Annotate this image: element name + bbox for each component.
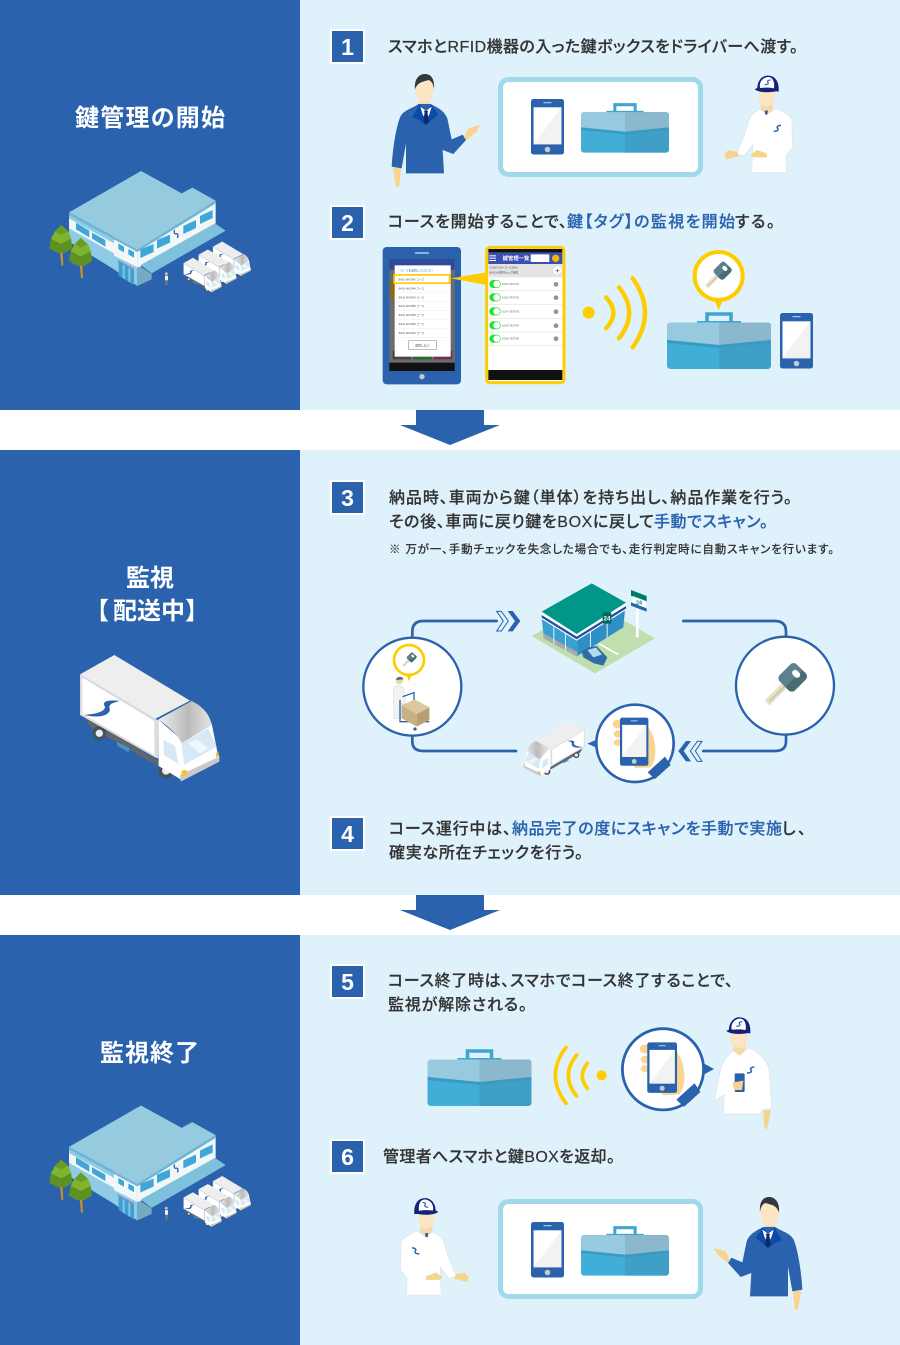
arrow down 2 — [400, 895, 500, 930]
step 1 text: スマホとRFID機器の入った鍵ボックスをドライバーへ渡す。 — [388, 38, 798, 56]
panel: end of monitoring — [0, 935, 900, 1345]
small truck — [524, 721, 585, 776]
circle: key — [736, 637, 834, 735]
step 5 text: コース終了時は、スマホでコース終了することで、 — [388, 972, 733, 990]
heading: start: 鍵管理の開始 — [75, 105, 225, 132]
step 5 badge — [331, 965, 364, 998]
circle: driver with cart — [363, 638, 461, 736]
tablet with course dialog: BA01 MK0359 コース — [399, 322, 424, 326]
driver with phone — [714, 1017, 772, 1131]
step 4 text: 納品完了の度にスキャンを手動で実施 — [512, 820, 782, 838]
step 5 text — [388, 972, 733, 1014]
step 4 badge: 4 — [341, 821, 354, 847]
step 3 text: 納品時、車両から鍵（単体）を持ち出し、納品作業を行う。 — [389, 489, 792, 507]
tablet with course dialog: コースを選択してください — [400, 267, 433, 272]
illustration: delivery truck — [80, 655, 219, 782]
frame: phone and key box — [500, 80, 700, 174]
yellow app screen: 2/1/08 テストコース(MH) — [489, 265, 518, 269]
tablet with course dialog: 選択しない — [415, 343, 430, 348]
step 2 text: コースを開始することで、 — [388, 213, 567, 231]
tablet with course dialog — [383, 247, 461, 384]
chevrons right — [497, 611, 520, 631]
arrow down 1 — [400, 410, 500, 445]
illustration: warehouse — [49, 1105, 251, 1227]
tablet with course dialog: BA01 MK0355 コース — [399, 304, 424, 308]
tablet with course dialog: BA01 MK0343 コース — [399, 278, 424, 282]
step 1 badge — [331, 30, 364, 63]
step 4 badge — [331, 817, 364, 850]
convenience store: 24 — [636, 600, 642, 606]
yellow app screen: + — [555, 266, 559, 275]
yellow app screen: 16:52 TEST02 — [502, 295, 520, 299]
yellow app screen: 16:54 TEST03 — [502, 309, 520, 313]
wireless signal — [583, 278, 645, 347]
panel: monitoring during delivery — [0, 450, 900, 895]
step 6 text: 管理者へスマホと鍵BOXを返却。 — [383, 1148, 615, 1166]
convenience store: 24 — [604, 617, 611, 623]
smartphone — [780, 313, 813, 368]
heading: monitoring — [85, 565, 209, 625]
tablet with course dialog: BA01 MK0344 コース — [399, 286, 424, 290]
key box — [428, 1051, 532, 1106]
bubble tail — [703, 1063, 714, 1075]
app screens — [383, 247, 743, 384]
step 1 badge: 1 — [341, 34, 354, 60]
step 3 text: 手動でスキャン。 — [654, 513, 768, 531]
heading: monitoring: 監視 — [126, 565, 174, 592]
convenience store — [532, 583, 655, 673]
yellow app screen: 16:50 TEST01 — [502, 282, 520, 286]
wireless signal — [555, 1047, 607, 1103]
bubble tail — [587, 739, 597, 748]
step 2 badge: 2 — [341, 210, 354, 236]
step 5 text: 監視が解除される。 — [388, 995, 527, 1014]
step 3 text: その後、車両に戻り鍵をBOXに戻して — [389, 513, 654, 531]
tablet with course dialog: BA01 MK0358 コース — [399, 313, 424, 317]
step 4 text: コース運行中は、 — [389, 820, 511, 838]
step 4 text — [389, 820, 806, 862]
step 4 text: し、 — [782, 821, 806, 838]
tablet with course dialog: BA01 MK0354 コース — [399, 295, 424, 299]
circle: phone in hand — [622, 1029, 704, 1110]
yellow app screen: 16:56 TEST04 — [502, 323, 520, 327]
step 2 badge — [331, 206, 364, 239]
driver figure — [724, 76, 793, 173]
manager figure — [392, 74, 480, 187]
yellow app screen — [487, 247, 564, 383]
yellow app screen: BA10H 前回チェック時間 — [489, 270, 519, 274]
step 6 badge: 6 — [341, 1144, 354, 1170]
step 6 badge — [331, 1140, 364, 1173]
step 3 badge — [331, 481, 364, 514]
driver figure — [400, 1198, 469, 1295]
step 4 text: 確実な所在チェックを行う。 — [389, 844, 583, 862]
manager figure — [714, 1197, 802, 1310]
step 3 text — [389, 489, 792, 531]
heading: monitoring: 【配送中】 — [85, 598, 209, 625]
panel: start of key management — [0, 0, 900, 410]
step 2 text: 鍵【タグ】の監視を開始 — [567, 213, 735, 231]
step 5 badge: 5 — [341, 969, 354, 995]
note: ※ 万が一、手動チェックを失念した場合でも、走行判定時に自動スキャンを行います。 — [389, 542, 834, 556]
yellow app screen: 鍵管理一覧 — [503, 254, 530, 262]
heading: end of monitoring: 監視終了 — [100, 1040, 199, 1067]
chevrons left — [678, 741, 702, 761]
step 3 badge: 3 — [341, 485, 354, 511]
frame: phone and key box — [500, 1202, 700, 1296]
step 2 text: する。 — [735, 213, 775, 231]
step 2 text — [388, 213, 775, 231]
circle: phone in hand — [596, 705, 674, 782]
callout wedge — [451, 272, 487, 285]
key box — [667, 314, 771, 369]
yellow app screen: 16:58 TEST05 — [502, 337, 520, 341]
key bubble — [695, 252, 743, 310]
tablet with course dialog: BA01 MK0360 コース — [399, 331, 424, 335]
cycle lines — [412, 621, 786, 751]
delivery cycle diagram — [363, 583, 834, 782]
illustration: warehouse — [49, 171, 251, 292]
